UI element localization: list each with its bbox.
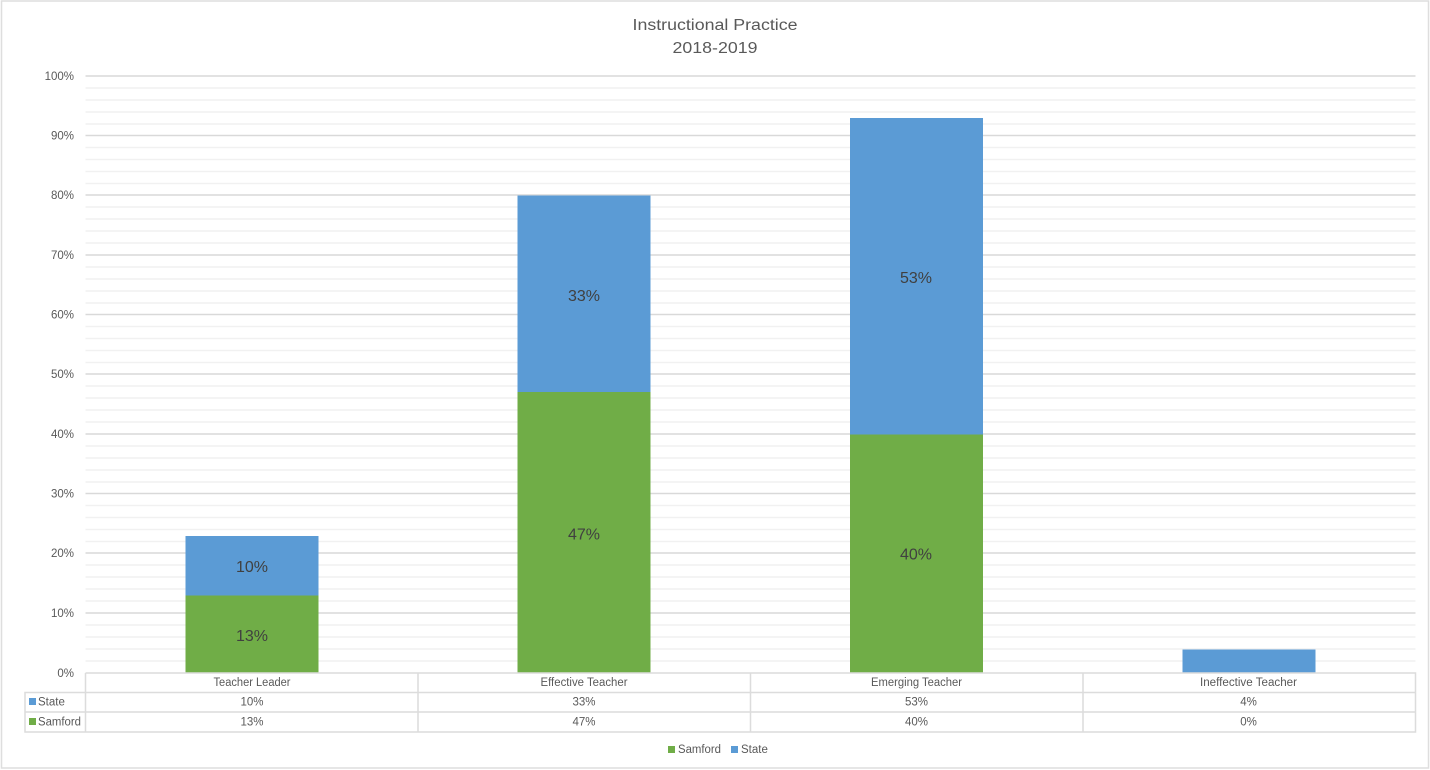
table values: Ineffective Teacher bbox=[1200, 677, 1297, 689]
y axis labels: 20% bbox=[51, 548, 74, 560]
y axis labels: 100% bbox=[45, 71, 74, 83]
bar: Emerging Teacher bbox=[850, 118, 983, 673]
title: 2018-2019 bbox=[672, 40, 758, 57]
table values: Effective Teacher bbox=[540, 677, 628, 689]
y axis labels: 70% bbox=[51, 250, 74, 262]
bar: Emerging Teacher: 53% bbox=[900, 270, 932, 287]
bar: Teacher Leader: 10% bbox=[236, 559, 268, 576]
table values: 33% bbox=[572, 696, 596, 708]
y axis labels: 0% bbox=[57, 668, 74, 680]
legend: State bbox=[741, 744, 768, 756]
y axis labels bbox=[45, 71, 74, 680]
y axis labels: 50% bbox=[51, 369, 74, 381]
table values: 4% bbox=[1240, 696, 1257, 708]
table values: 10% bbox=[240, 696, 264, 708]
legend: Samford bbox=[678, 744, 721, 756]
bar: Teacher Leader: 13% bbox=[236, 628, 268, 645]
table values: Emerging Teacher bbox=[871, 677, 962, 689]
table values: Teacher Leader bbox=[214, 677, 291, 689]
y axis labels: 10% bbox=[51, 608, 74, 620]
y axis labels: 80% bbox=[51, 190, 74, 202]
legend keys in table bbox=[29, 696, 81, 728]
title: Instructional Practice bbox=[632, 17, 798, 34]
bar: Effective Teacher: 33% bbox=[568, 288, 600, 305]
legend bbox=[668, 744, 768, 756]
y axis labels: 60% bbox=[51, 310, 74, 322]
bar: Teacher Leader bbox=[186, 536, 318, 673]
table values: 53% bbox=[905, 696, 928, 708]
bar: Ineffective Teacher bbox=[1182, 650, 1316, 673]
table values bbox=[214, 677, 1297, 728]
table values: 47% bbox=[572, 716, 596, 728]
y axis labels: 30% bbox=[51, 488, 74, 500]
bar: Emerging Teacher: 40% bbox=[900, 546, 932, 564]
data table bbox=[25, 673, 1416, 732]
table values: 13% bbox=[240, 716, 264, 728]
table values: 40% bbox=[905, 716, 928, 728]
bar: Effective Teacher: 47% bbox=[568, 526, 600, 544]
y axis labels: 90% bbox=[51, 130, 74, 142]
legend keys in table: State bbox=[38, 696, 65, 708]
bar: Effective Teacher bbox=[518, 196, 650, 673]
table values: 0% bbox=[1240, 716, 1257, 728]
title bbox=[632, 17, 798, 57]
legend keys in table: Samford bbox=[38, 716, 81, 728]
y axis labels: 40% bbox=[51, 429, 74, 441]
